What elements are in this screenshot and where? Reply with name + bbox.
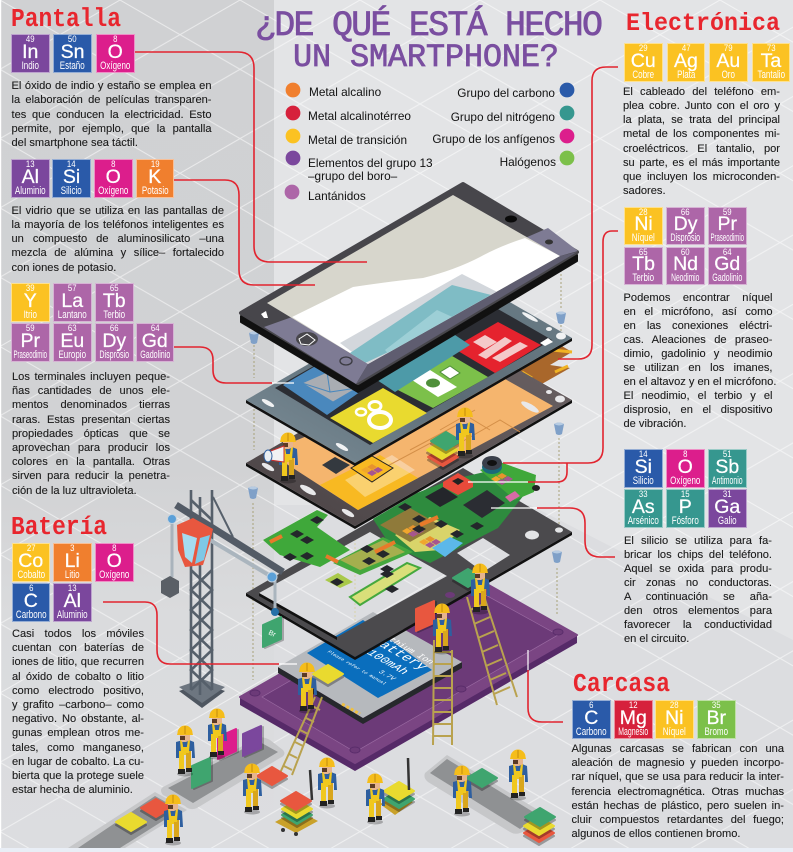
- text: Tb: [103, 290, 126, 312]
- conveyor belts: [68, 737, 545, 848]
- text: Oxígeno: [670, 474, 700, 486]
- text: 49: [26, 34, 35, 45]
- title: ¿DE QUÉ ESTÁ HECHO: [255, 5, 603, 46]
- text: Galio: [718, 514, 737, 526]
- text: cableado: El cableado del teléfono em-: [623, 86, 780, 98]
- text: batería: tales, como manganeso,: [12, 742, 144, 754]
- text: indio y estaño: permite, por ejemplo, que la pantalla: [12, 123, 212, 135]
- title: UN SMARTPHONE?: [293, 39, 559, 76]
- text: carcasa: están hechas de plástico, pero suelen in-: [572, 800, 784, 812]
- text: Neodimio: [671, 272, 700, 284]
- text: 64: [150, 323, 159, 334]
- text: 73: [767, 43, 775, 54]
- text: Grupo del carbono: [457, 86, 555, 100]
- text: 64: [723, 246, 732, 258]
- text: tierras raras: raras. Estas presentan ciertas: [12, 414, 170, 426]
- text: níquel: Podemos encontrar níquel: [624, 292, 772, 304]
- text: vidrio: la mayoría de los teléfonos inteligentes es: [12, 219, 224, 231]
- text: 33: [639, 489, 648, 500]
- text: níquel: cas. Aleaciones de praseo-: [624, 334, 772, 346]
- text: 6: [589, 700, 593, 711]
- text: Aluminio: [57, 608, 88, 620]
- text: Cobre: [632, 68, 654, 80]
- text: cableado: que incluyen los microconden-: [623, 171, 780, 183]
- text: Y: [24, 290, 37, 312]
- text: carcasa: rar níquel, que se usa para reducir la inter-: [572, 771, 784, 783]
- crane: Br: [267, 630, 277, 639]
- text: Carbono: [15, 608, 46, 620]
- text: 13: [68, 583, 77, 594]
- battery: 100mAh: [363, 648, 412, 677]
- title: [255, 5, 603, 76]
- frame layer: [246, 468, 572, 660]
- text: batería: [12, 628, 144, 796]
- text: Mg: [620, 706, 647, 728]
- text: Níquel: [632, 232, 655, 244]
- text: –grupo del boro–: [308, 168, 397, 182]
- text: silicio: Aquel se oxida para produ-: [624, 563, 772, 575]
- phone glass: [241, 184, 578, 392]
- text: Al: [22, 166, 39, 188]
- text: Litio: [65, 568, 80, 580]
- text: Dy: [674, 213, 697, 235]
- text: tierras raras: ñas cantidades de unos ele-: [12, 385, 170, 397]
- text: Terbio: [633, 272, 654, 284]
- text: Al: [64, 590, 81, 612]
- text: carcasa: aleación de magnesio y pueden incorpo-: [572, 757, 784, 769]
- text: C: [24, 590, 38, 612]
- display layer with tiles: [246, 275, 572, 466]
- text: K: [148, 166, 161, 188]
- text: 39: [26, 283, 35, 294]
- text: Indio: [22, 60, 39, 72]
- text: Plata: [677, 68, 695, 80]
- text: Silicio: [633, 474, 654, 486]
- text: níquel: se utilizan en los imanes,: [624, 362, 772, 374]
- text: níquel: de vibración.: [624, 418, 686, 430]
- text: silicio: den otros elementos para: [624, 605, 772, 617]
- text: Si: [635, 456, 652, 478]
- white line ends: [272, 383, 537, 670]
- text: Bromo: [704, 726, 728, 738]
- text: Praseodimio: [13, 348, 47, 360]
- text: tierras raras: colores en la pantalla. Otras: [12, 456, 170, 468]
- legend right: [432, 86, 556, 168]
- text: cableado: croeléctricos. El tantalio, por: [623, 143, 780, 155]
- megaphone: [264, 446, 284, 462]
- heading: Carcasa: Carcasa: [573, 670, 670, 699]
- text: Elementos del grupo 13: [308, 156, 433, 170]
- connector lines: [103, 52, 618, 722]
- text: La: [61, 290, 83, 312]
- screws and guide lines: [248, 270, 566, 770]
- text: 8: [111, 159, 115, 170]
- text: cableado: su parte, es el más importante: [623, 157, 780, 169]
- text: P: [679, 496, 692, 518]
- text: batería: Casi todos los móviles: [12, 628, 144, 640]
- text: In: [22, 40, 38, 62]
- text: 65: [639, 246, 648, 258]
- heading: Batería: Batería: [11, 513, 107, 542]
- text: 66: [110, 323, 119, 334]
- text: 60: [681, 246, 690, 258]
- text: níquel: dimio, gadolinio y neodimio: [624, 348, 772, 360]
- text: 28: [639, 206, 648, 218]
- text: carcasa: ferencia electromagnética. Otras muchas: [572, 786, 784, 798]
- text: níquel: disprosio, en el dispositivo: [624, 404, 772, 416]
- text: batería: como electrodo positivo,: [12, 685, 144, 697]
- text: Europio: [58, 348, 86, 360]
- text: indio y estaño: El óxido de indio y estaño se emplea en: [12, 80, 212, 92]
- text: níquel: El neodimio, el terbio y el: [624, 390, 772, 402]
- text: Ni: [665, 706, 683, 728]
- legend left: [308, 85, 433, 203]
- text: Ta: [761, 50, 781, 72]
- text: 3: [70, 543, 74, 554]
- legend dots: [285, 83, 574, 199]
- Carcasa tiles: [572, 700, 736, 739]
- text: Oro: [722, 68, 735, 80]
- text: 19: [150, 159, 159, 170]
- text: O: [106, 166, 121, 188]
- text: Arsénico: [628, 514, 659, 526]
- text: batería: y grafito –carbono– como: [12, 699, 144, 711]
- text: Dy: [102, 330, 126, 352]
- text: tierras raras: ción de la luz ultravioleta.: [12, 485, 137, 497]
- text: níquel: en las conexiones eléctri-: [624, 320, 772, 332]
- text: Praseodimio: [710, 232, 744, 244]
- text: 8: [112, 543, 116, 554]
- text: cableado: la plata, se trata del principal: [623, 114, 780, 126]
- text: Pr: [718, 213, 737, 235]
- text: silicio: bricar los chips del teléfono.: [624, 549, 772, 561]
- text: 50: [68, 34, 77, 45]
- text: Halógenos: [500, 154, 556, 168]
- text: Si: [63, 166, 80, 188]
- text: Grupo de los anfígenos: [432, 132, 555, 146]
- flex cable: [520, 345, 572, 385]
- battery: Please refer to manual: [325, 650, 388, 686]
- text: Lantano: [58, 308, 87, 320]
- text: silicio: El silicio se utiliza para fa-: [624, 535, 772, 547]
- text: Disprosio: [99, 348, 129, 360]
- text: vidrio: El vidrio que se utiliza en las pantallas de: [12, 204, 224, 216]
- text: Metal alcalino: [309, 85, 381, 99]
- crane: [161, 490, 283, 708]
- text: Cobalto: [17, 568, 45, 580]
- text: Silicio: [61, 184, 82, 196]
- text: 79: [724, 43, 733, 54]
- text: carcasa: Algunas carcasas se fabrican con una: [572, 743, 784, 755]
- text: batería: en lugar de cobalto. La cu-: [12, 756, 144, 768]
- text: vidrio: [12, 204, 224, 274]
- text: Nd: [673, 253, 698, 275]
- text: Au: [716, 50, 740, 72]
- text: Terbio: [103, 308, 125, 320]
- text: silicio: favorecer la conductividad: [624, 619, 772, 631]
- text: 63: [68, 323, 77, 334]
- text: 59: [26, 323, 35, 334]
- carcass: [240, 570, 577, 771]
- text: Br: [706, 706, 726, 728]
- text: Gadolinio: [712, 272, 742, 284]
- text: cableado: [623, 86, 780, 197]
- text: O: [678, 456, 693, 478]
- text: Sn: [61, 40, 84, 62]
- text: vidrio: con iones de potasio.: [12, 262, 116, 274]
- text: Itrio: [24, 308, 37, 320]
- text: Co: [18, 550, 43, 572]
- text: 8: [113, 34, 117, 45]
- text: silicio: [624, 535, 772, 645]
- text: Gd: [142, 330, 168, 352]
- text: Grupo del nitrógeno: [451, 110, 555, 124]
- text: tierras raras: sirven para reducir la penetra-: [12, 470, 170, 482]
- text: 8: [683, 449, 687, 460]
- text: 35: [712, 700, 721, 711]
- text: Fósforo: [672, 514, 699, 526]
- text: cableado: plea cobre. Junto con el oro y: [623, 100, 780, 112]
- text: indio y estaño: tes que conducen la electricidad. Esto: [12, 108, 212, 120]
- Pantalla tiles row 1: [11, 34, 135, 73]
- text: Antimonio: [712, 474, 743, 486]
- text: Ga: [714, 496, 740, 518]
- battery: [278, 612, 462, 724]
- text: 29: [639, 43, 648, 54]
- text: 51: [723, 449, 732, 460]
- heading: Pantalla: Pantalla: [11, 5, 121, 34]
- text: níquel: [624, 292, 776, 430]
- text: Ni: [634, 213, 653, 235]
- text: 13: [26, 159, 35, 170]
- text: Aluminio: [15, 184, 46, 196]
- text: 31: [723, 489, 732, 500]
- text: indio y estaño: la elaboración de películas transparen-: [12, 94, 212, 106]
- Batería tiles: [12, 543, 134, 622]
- text: Gd: [714, 253, 740, 275]
- Pantalla tiles: tierras raras: [11, 283, 174, 362]
- text: Ag: [674, 50, 698, 72]
- text: batería: iones de litio, que recurren: [12, 656, 144, 668]
- text: Sb: [715, 456, 739, 478]
- text: Tantalio: [757, 68, 785, 80]
- text: tierras raras: [12, 371, 170, 497]
- carts and element stacks: [116, 432, 555, 845]
- text: 12: [629, 700, 638, 711]
- text: 47: [682, 43, 690, 54]
- Electrónica tiles: silicio: [624, 449, 747, 528]
- text: 14: [639, 449, 648, 460]
- heading: Electrónica: Electrónica: [626, 9, 780, 38]
- text: silicio: en el circuito.: [624, 633, 689, 645]
- text: carcasa: [572, 743, 784, 840]
- text: silicio: cir zonas no conductoras.: [624, 577, 772, 589]
- text: carcasa: algunos de ellos contienen bromo.: [572, 828, 740, 840]
- workers: [164, 408, 528, 846]
- Electrónica tiles row 1: [624, 43, 790, 82]
- text: 15: [681, 489, 690, 500]
- ladders: [280, 590, 517, 775]
- text: silicio: A continuación se aña-: [624, 591, 772, 603]
- orange board layer: [246, 338, 572, 529]
- text: batería: al óxido de cobalto o litio: [12, 671, 144, 683]
- battery: attery: [374, 640, 431, 673]
- text: carcasa: cluir compuestos retardantes del fuego;: [572, 814, 784, 826]
- text: 6: [29, 583, 33, 594]
- text: Magnesio: [618, 726, 648, 738]
- text: 57: [68, 283, 77, 294]
- text: indio y estaño: [12, 80, 212, 149]
- circuit boards: [263, 456, 540, 605]
- text: Oxígeno: [99, 568, 129, 580]
- battery: 3.7V: [375, 670, 398, 682]
- text: O: [108, 40, 123, 62]
- text: Lantánidos: [308, 189, 366, 203]
- text: Estaño: [60, 60, 85, 72]
- text: tierras raras: aprovechan para producir los: [12, 442, 170, 454]
- battery: thium Ion: [385, 636, 437, 666]
- text: batería: estar hecha de aluminio.: [12, 784, 133, 796]
- text: vidrio: mezcla de alúmina y sílice– fortalecido: [12, 247, 224, 259]
- text: As: [632, 496, 655, 518]
- text: Oxígeno: [98, 184, 128, 196]
- text: Cu: [631, 50, 656, 72]
- text: Gadolinio: [140, 348, 170, 360]
- text: Eu: [60, 330, 84, 352]
- text: Li: [65, 550, 80, 572]
- text: Metal alcalinotérreo: [308, 108, 411, 122]
- text: batería: bierta que la protege suele: [12, 770, 144, 782]
- Pantalla tiles row 2: [11, 159, 174, 198]
- text: tierras raras: propiedades ópticas que se: [12, 428, 170, 440]
- text: Oxígeno: [100, 60, 130, 72]
- text: O: [107, 550, 122, 572]
- text: Metal de transición: [308, 132, 407, 146]
- text: tierras raras: mentos denominados tierras: [12, 399, 170, 411]
- text: Potasio: [141, 184, 168, 196]
- text: batería: negativo. No obstante, al-: [12, 713, 144, 725]
- text: 28: [670, 700, 679, 711]
- text: Pr: [20, 330, 40, 352]
- Electrónica tiles: níquel y tierras raras: [624, 206, 747, 285]
- text: 59: [723, 206, 732, 218]
- text: C: [584, 706, 598, 728]
- text: níquel: en el micrófono, así como: [624, 306, 772, 318]
- text: batería: cuentan con baterías de: [12, 642, 144, 654]
- text: tierras raras: Los terminales incluyen peque-: [12, 371, 170, 383]
- text: cableado: sadores.: [623, 185, 666, 197]
- text: 14: [67, 159, 76, 170]
- text: 65: [110, 283, 119, 294]
- text: Carbono: [576, 726, 607, 738]
- text: batería: gunas emplean otros me-: [12, 727, 144, 739]
- text: Tb: [632, 253, 655, 275]
- text: Disprosio: [671, 232, 700, 244]
- text: níquel: en el altavoz y en el micrófono.: [624, 376, 776, 388]
- text: 27: [26, 543, 35, 554]
- text: 66: [681, 206, 690, 218]
- text: indio y estaño: del smartphone sea táctil.: [12, 137, 138, 149]
- text: cableado: metal de los componentes mi-: [623, 128, 780, 140]
- text: Níquel: [663, 726, 686, 738]
- text: vidrio: un compuesto de aluminosilicato –una: [12, 233, 224, 245]
